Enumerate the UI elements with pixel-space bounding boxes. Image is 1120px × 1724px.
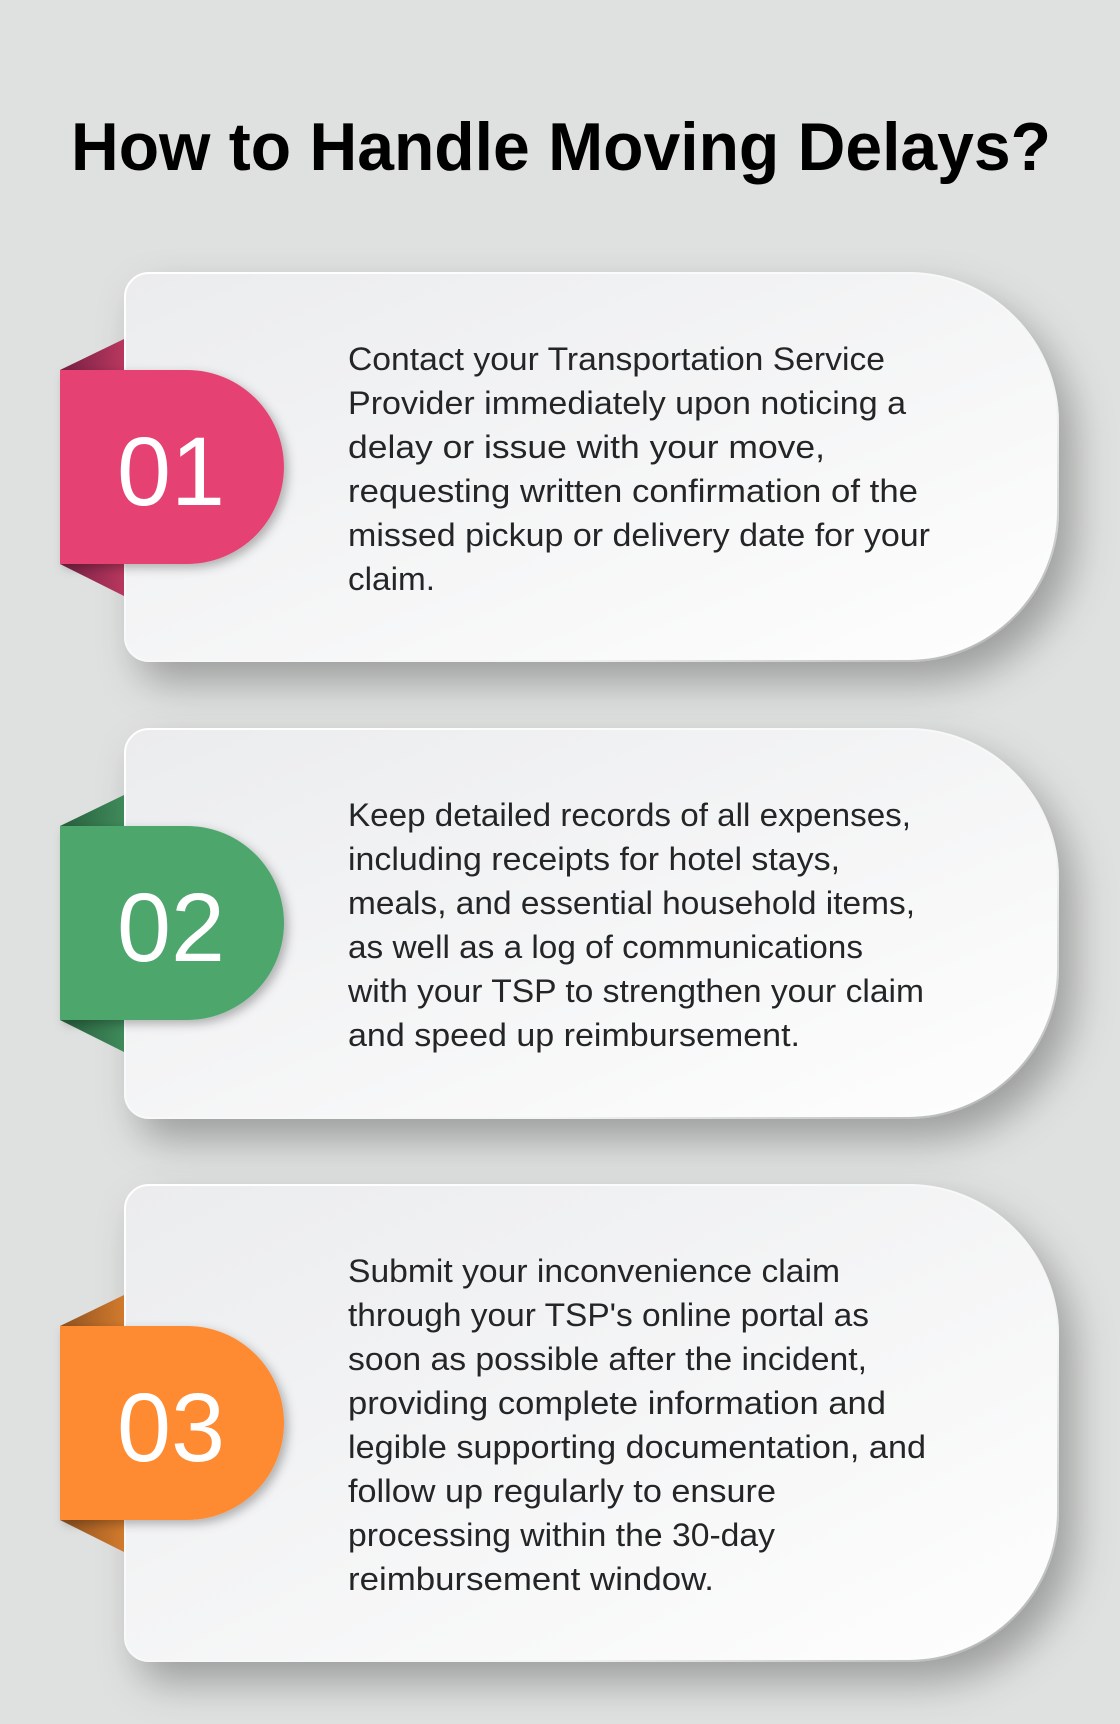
ribbon fold bottom 2 xyxy=(60,1020,124,1052)
text block 1: claim. xyxy=(348,561,435,597)
text block 3: follow up regularly to ensure xyxy=(348,1473,776,1509)
ribbon fold top 2 xyxy=(60,795,124,826)
text block 1: missed pickup or delivery date for your xyxy=(348,517,930,553)
text block 3 xyxy=(348,1253,926,1597)
title: How to Handle Moving Delays? xyxy=(71,109,1051,185)
text block 2: with your TSP to strengthen your claim xyxy=(347,973,924,1009)
number 03: 03 xyxy=(117,1373,225,1482)
card 1 background xyxy=(125,273,1058,661)
ribbon fold top 1 xyxy=(60,339,124,370)
ribbon fold bottom 1 xyxy=(60,564,124,596)
text block 2: Keep detailed records of all expenses, xyxy=(348,797,911,833)
number 01: 01 xyxy=(117,417,225,526)
ribbon fold top 3 xyxy=(60,1295,124,1326)
text block 1 xyxy=(348,341,930,597)
card 2 background xyxy=(125,729,1058,1118)
card 3 background xyxy=(125,1185,1058,1661)
text block 2 xyxy=(347,797,924,1053)
text block 1: delay or issue with your move, xyxy=(348,429,825,465)
text block 1: Provider immediately upon noticing a xyxy=(348,385,907,421)
text block 3: through your TSP's online portal as xyxy=(348,1297,869,1333)
text block 1: requesting written confirmation of the xyxy=(348,473,918,509)
panel: step 2 xyxy=(60,729,1058,1118)
text block 3: reimbursement window. xyxy=(348,1561,714,1597)
number badge 2 xyxy=(60,826,284,1020)
number badge 1 xyxy=(60,370,284,564)
text block 2: including receipts for hotel stays, xyxy=(348,841,840,877)
text block 3: Submit your inconvenience claim xyxy=(348,1253,840,1289)
text block 2: as well as a log of communications xyxy=(348,929,863,965)
text block 3: soon as possible after the incident, xyxy=(348,1341,867,1377)
number badge 3 xyxy=(60,1326,284,1520)
panel: step 3 xyxy=(60,1185,1058,1661)
text block 3: processing within the 30-day xyxy=(348,1517,776,1553)
panel: step 1 xyxy=(60,273,1058,661)
text block 3: providing complete information and xyxy=(348,1385,886,1421)
number 02: 02 xyxy=(117,873,225,982)
text block 1: Contact your Transportation Service xyxy=(348,341,885,377)
text block 2: and speed up reimbursement. xyxy=(348,1017,800,1053)
ribbon fold bottom 3 xyxy=(60,1520,124,1552)
text block 3: legible supporting documentation, and xyxy=(348,1429,926,1465)
text block 2: meals, and essential household items, xyxy=(348,885,915,921)
